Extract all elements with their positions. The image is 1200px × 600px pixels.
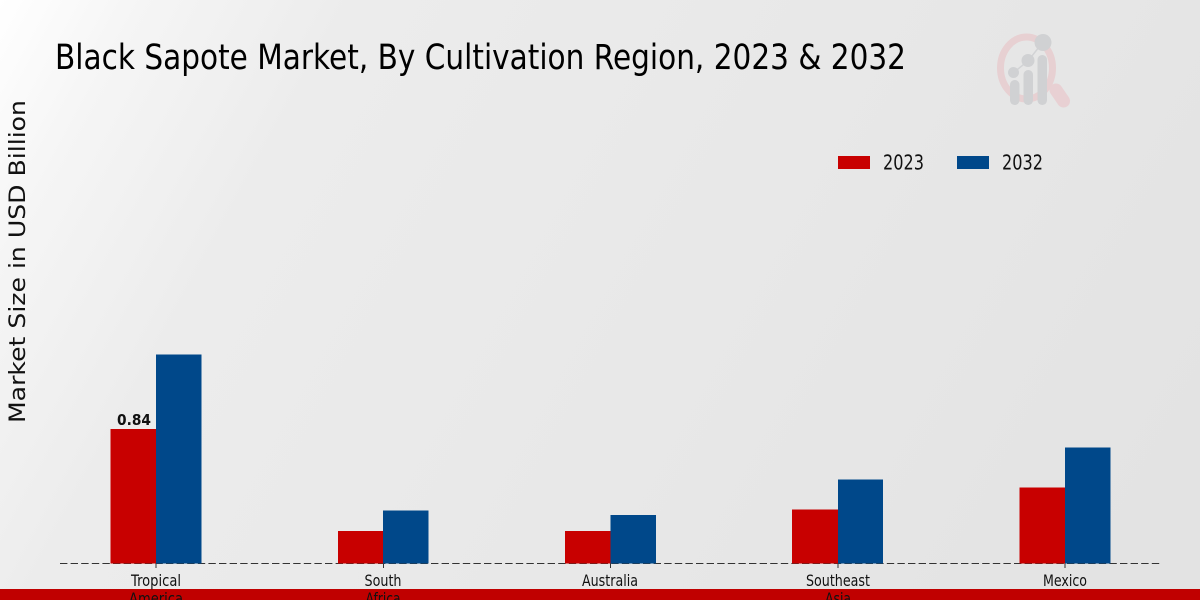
x-axis baseline bbox=[60, 562, 1160, 564]
legend item: 2032: 2032 bbox=[1002, 150, 1043, 174]
icon: magnifier logo watermark bbox=[1000, 34, 1064, 105]
label: South Africa: South bbox=[364, 571, 402, 590]
label: Tropical America bbox=[129, 571, 183, 600]
label: Tropical America: Tropical bbox=[130, 571, 181, 590]
legend bbox=[838, 150, 1043, 174]
footer bar bbox=[0, 589, 1200, 600]
legend item: 2032 bbox=[957, 150, 1043, 174]
label: Southeast Asia: Southeast bbox=[806, 571, 870, 590]
label: Southeast Asia bbox=[806, 571, 870, 600]
label: Mexico: Mexico bbox=[1043, 571, 1087, 590]
bar chart bbox=[60, 354, 1160, 568]
legend item: 2023 bbox=[838, 150, 924, 174]
label: Australia: Australia bbox=[582, 571, 638, 590]
bars: Australia bbox=[565, 515, 656, 564]
data label: 0.84: 0.84 bbox=[117, 411, 151, 429]
title: Black Sapote Market, By Cultivation Region, 2023 & 2032 bbox=[55, 38, 906, 78]
legend item: 2023: 2023 bbox=[883, 150, 924, 174]
bars: Tropical America bbox=[110, 354, 202, 564]
y-axis label: Market Size in USD Billion bbox=[5, 100, 31, 423]
label: South Africa bbox=[364, 571, 402, 600]
bars: Southeast Asia bbox=[792, 480, 883, 564]
bars: South Africa bbox=[338, 510, 428, 564]
x-axis labels bbox=[129, 571, 1087, 600]
bars: Mexico bbox=[1020, 448, 1110, 564]
